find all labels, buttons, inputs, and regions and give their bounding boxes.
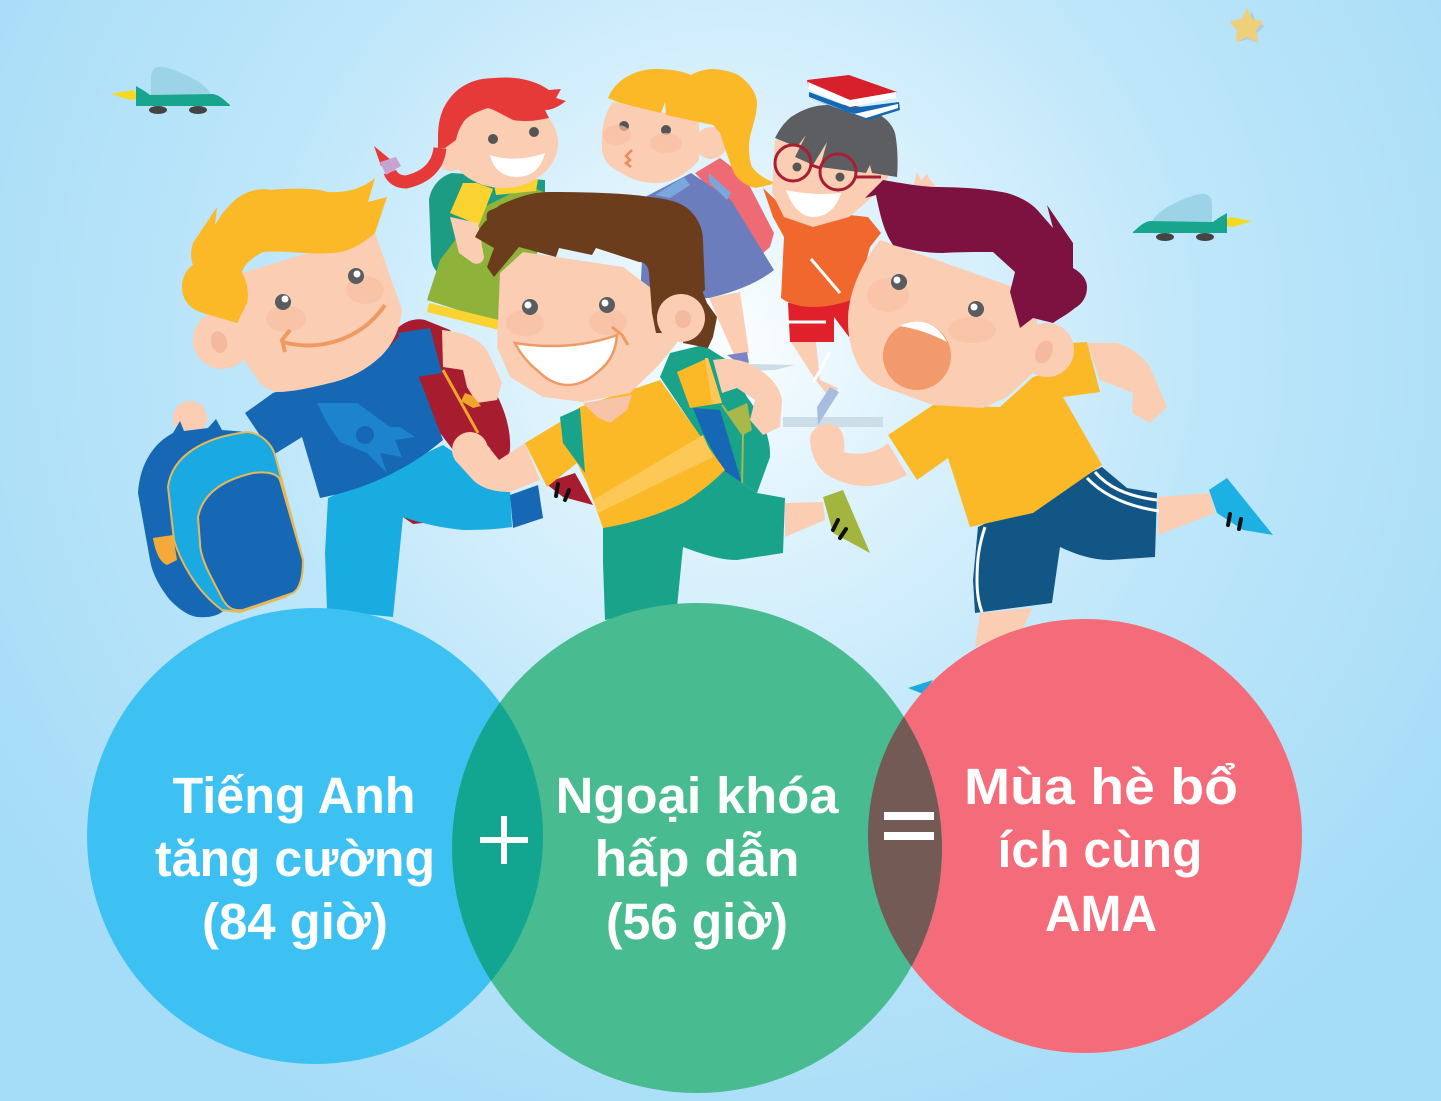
text: Mùa hè bổ ích cùng AMA: AMA [1045, 885, 1157, 942]
character: boy in blue with backpack [138, 178, 543, 617]
character: boy with glasses and books [763, 75, 937, 425]
ground shadows [750, 364, 883, 427]
overlap: blue and green [452, 702, 543, 981]
text: Tiếng Anh tăng cường (84 giờ): (84 giờ) [202, 893, 388, 950]
character: boy in yellow with brown hair [452, 192, 870, 620]
icon: equals sign [884, 812, 934, 840]
overlap: green and pink [868, 716, 942, 966]
red backpack [382, 319, 510, 461]
text: Tiếng Anh tăng cường (84 giờ) [155, 767, 435, 950]
arm right [713, 359, 782, 435]
icon: blue backpack [138, 401, 304, 617]
character: girl with yellow ponytail [602, 69, 777, 363]
icon: stack of books [807, 75, 900, 120]
circle: Ngoại khóa hấp dẫn [452, 603, 942, 1093]
head [497, 252, 677, 402]
text: Ngoại khóa hấp dẫn (56 giờ): hấp dẫn [594, 830, 800, 887]
backpack [660, 345, 770, 493]
shorts [973, 467, 1157, 613]
text: Tiếng Anh tăng cường (84 giờ): Tiếng Anh [172, 767, 416, 824]
icon: star [1231, 10, 1265, 43]
head [848, 240, 1043, 408]
character: girl with red hair [374, 78, 566, 330]
shirt [245, 333, 443, 498]
text: Ngoại khóa hấp dẫn (56 giờ): (56 giờ) [606, 893, 788, 950]
text: Mùa hè bổ ích cùng AMA [964, 758, 1238, 942]
text: Mùa hè bổ ích cùng AMA: Mùa hè bổ [964, 758, 1238, 815]
text: Mùa hè bổ ích cùng AMA: ích cùng [998, 821, 1202, 878]
left arm and fist [453, 440, 540, 492]
right leg and pants [785, 502, 825, 537]
text: Tiếng Anh tăng cường (84 giờ): tăng cường [155, 830, 435, 887]
circle: Tiếng Anh tăng cường [87, 608, 543, 1064]
shirt [888, 342, 1102, 527]
text: Ngoại khóa hấp dẫn (56 giờ) [556, 767, 839, 950]
icon: flying turtle car right [1133, 194, 1252, 241]
character: boy in yellow with maroon hair [810, 180, 1273, 694]
head [228, 233, 402, 392]
shirt [525, 380, 725, 528]
rocket print [317, 403, 415, 473]
icon: flying turtle car left [111, 67, 230, 114]
text: Ngoại khóa hấp dẫn (56 giờ): Ngoại khóa [556, 767, 839, 824]
hair back [683, 260, 717, 348]
red pack bits [545, 473, 593, 505]
circle: Mùa hè bổ ích cùng AMA [868, 619, 1302, 1053]
pants [325, 445, 512, 617]
icon: plus sign [480, 816, 528, 864]
